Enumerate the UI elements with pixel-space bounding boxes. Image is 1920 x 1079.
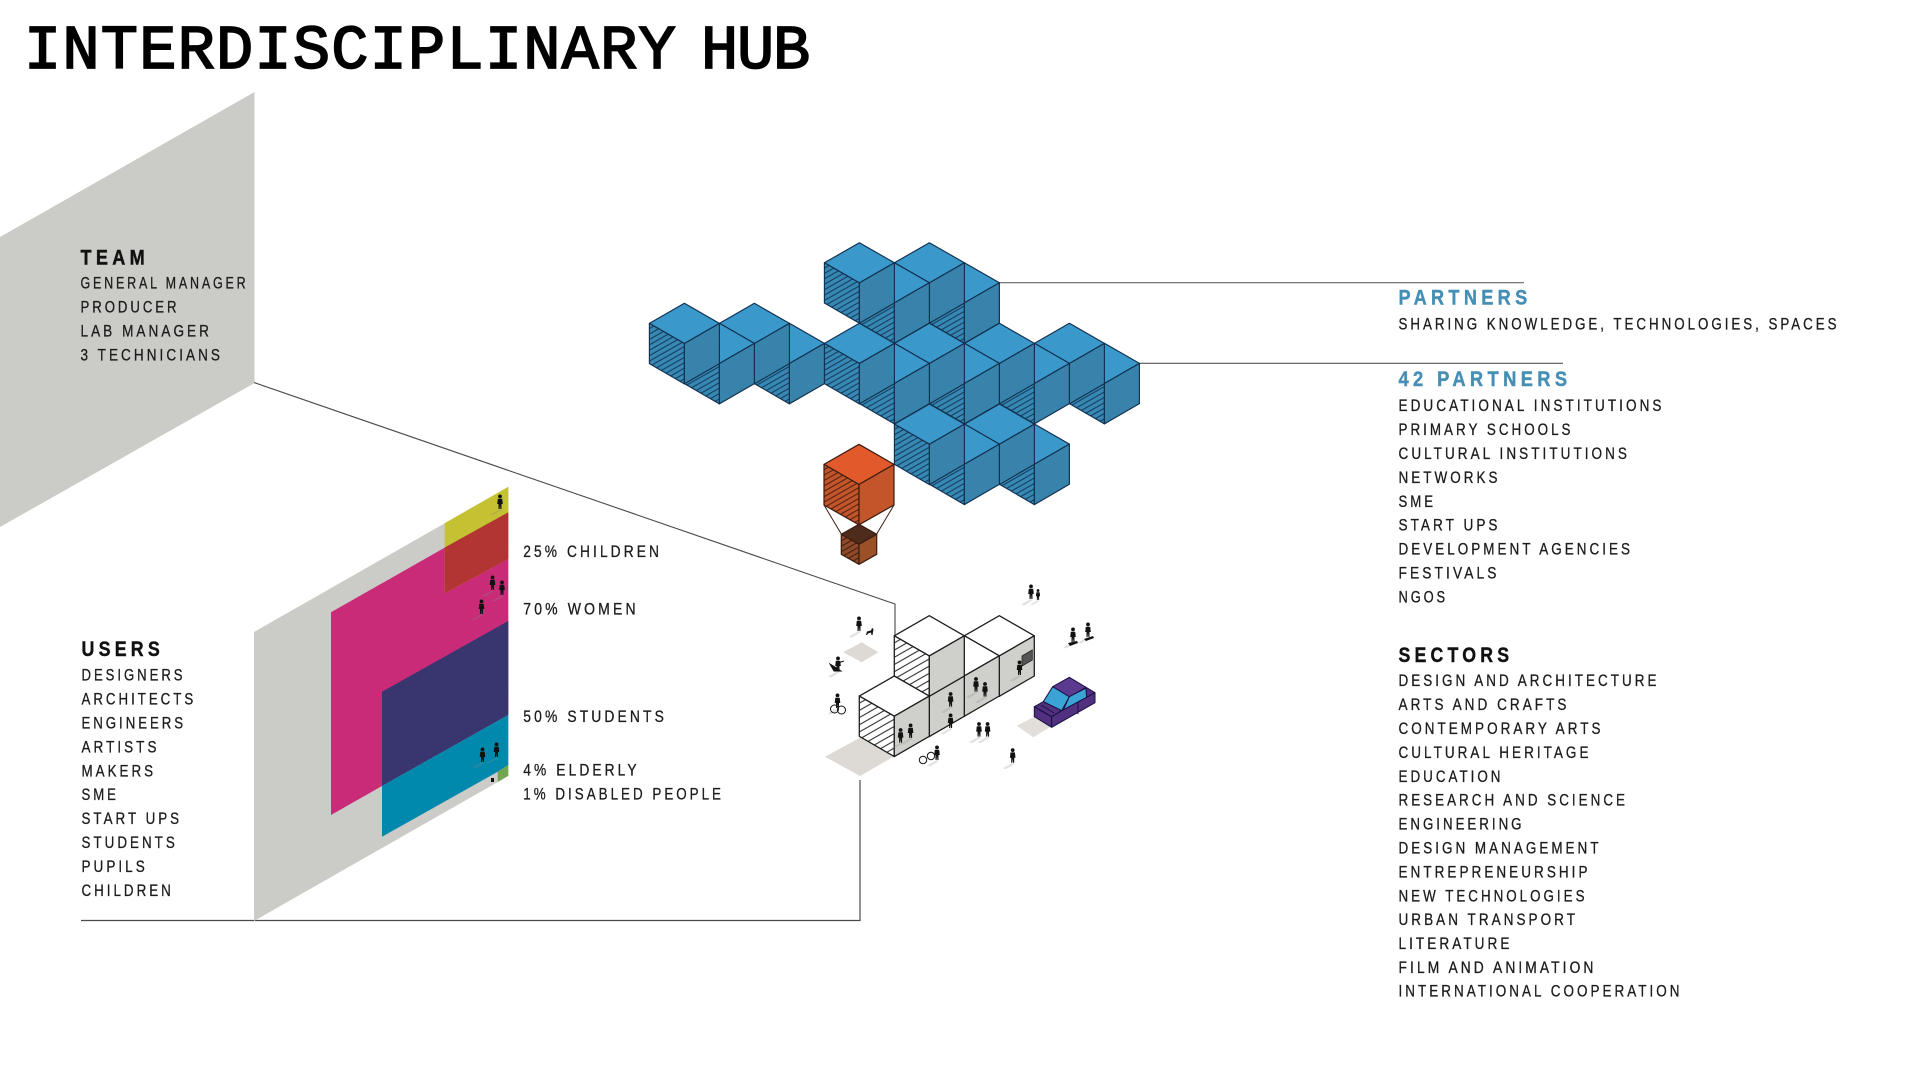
sectors list: LITERATURE bbox=[1398, 935, 1512, 953]
ground patch: car bbox=[1017, 717, 1051, 737]
chart labels: 1% DISABLED PEOPLE bbox=[523, 786, 724, 804]
figures around the building bbox=[828, 584, 1094, 769]
sectors list: DESIGN MANAGEMENT bbox=[1398, 840, 1602, 858]
users text block bbox=[82, 638, 196, 900]
team text block: LAB MANAGER bbox=[80, 322, 212, 340]
icon: car bbox=[1034, 677, 1095, 727]
ground patch: building bbox=[825, 738, 893, 776]
partners list: EDUCATIONAL INSTITUTIONS bbox=[1398, 397, 1664, 415]
partners heading and tagline bbox=[1398, 286, 1840, 334]
sectors list bbox=[1398, 644, 1682, 1001]
partners list: START UPS bbox=[1398, 517, 1500, 535]
chart labels: 25% CHILDREN bbox=[523, 543, 662, 561]
title: HUB bbox=[701, 16, 809, 87]
users text block: DESIGNERS bbox=[82, 666, 186, 684]
partners list: NGOS bbox=[1398, 588, 1448, 606]
sectors list: SECTORS bbox=[1398, 644, 1513, 667]
partners list: DEVELOPMENT AGENCIES bbox=[1398, 541, 1633, 559]
users text block: SME bbox=[82, 786, 119, 804]
users text block: PUPILS bbox=[82, 858, 148, 876]
users text block: ARCHITECTS bbox=[82, 690, 196, 708]
partners list: SME bbox=[1398, 493, 1436, 511]
sectors list: ENTREPRENEURSHIP bbox=[1398, 863, 1590, 881]
sectors list: EDUCATION bbox=[1398, 768, 1504, 786]
connector: partners lower bbox=[1139, 362, 1563, 364]
users text block: STUDENTS bbox=[82, 834, 178, 852]
users backdrop bbox=[254, 487, 508, 921]
partners cubes cloud bbox=[649, 243, 1139, 505]
sectors list: FILM AND ANIMATION bbox=[1398, 959, 1596, 977]
partners list bbox=[1398, 368, 1664, 606]
area: students 50% bbox=[382, 621, 508, 786]
area: women 70% bbox=[331, 512, 508, 815]
ground patch: plaza bbox=[843, 642, 878, 662]
partners list: FESTIVALS bbox=[1398, 564, 1500, 582]
chart labels: 70% WOMEN bbox=[523, 600, 639, 618]
area: children 25% bbox=[445, 487, 508, 593]
users text block: ARTISTS bbox=[82, 738, 160, 756]
partners list: 42 PARTNERS bbox=[1398, 368, 1572, 391]
users text block: START UPS bbox=[82, 810, 182, 828]
team text block: 3 TECHNICIANS bbox=[80, 346, 223, 364]
panel: team backdrop bbox=[0, 92, 254, 527]
partners list: NETWORKS bbox=[1398, 469, 1500, 487]
connector: users to building bbox=[81, 780, 860, 920]
sectors list: DESIGN AND ARCHITECTURE bbox=[1398, 672, 1660, 690]
sectors list: ARTS AND CRAFTS bbox=[1398, 696, 1570, 714]
chart labels: 4% ELDERLY bbox=[523, 762, 640, 780]
users text block: ENGINEERS bbox=[82, 714, 186, 732]
building: white cubes bbox=[859, 616, 1034, 757]
sectors list: CONTEMPORARY ARTS bbox=[1398, 720, 1604, 738]
connector: partners top bbox=[999, 282, 1524, 284]
area: elderly 4% bbox=[382, 715, 508, 837]
icon: orange balloon cube bbox=[824, 444, 894, 564]
team text block: TEAM bbox=[80, 246, 149, 270]
team text block bbox=[80, 246, 248, 364]
team text block: PRODUCER bbox=[80, 298, 180, 316]
sectors list: URBAN TRANSPORT bbox=[1398, 911, 1578, 929]
partners heading and tagline: PARTNERS bbox=[1398, 286, 1532, 310]
sectors list: ENGINEERING bbox=[1398, 816, 1524, 834]
sectors list: RESEARCH AND SCIENCE bbox=[1398, 792, 1628, 810]
users text block: USERS bbox=[82, 638, 164, 661]
users text block: CHILDREN bbox=[82, 882, 174, 900]
chart labels bbox=[523, 543, 724, 804]
users text block: MAKERS bbox=[82, 762, 156, 780]
users chart: isometric proportional areas bbox=[254, 487, 508, 921]
area: disabled people 1% bbox=[498, 765, 508, 782]
chart labels: 50% STUDENTS bbox=[523, 708, 667, 726]
sectors list: NEW TECHNOLOGIES bbox=[1398, 887, 1588, 905]
title: INTERDISCIPLINARY bbox=[24, 16, 677, 87]
sectors list: CULTURAL HERITAGE bbox=[1398, 744, 1592, 762]
icon: wall screen bbox=[1022, 650, 1032, 666]
area: children and women overlap bbox=[445, 512, 508, 593]
partners list: PRIMARY SCHOOLS bbox=[1398, 421, 1574, 439]
connector: team to building bbox=[254, 382, 895, 640]
partners list: CULTURAL INSTITUTIONS bbox=[1398, 445, 1630, 463]
team text block: GENERAL MANAGER bbox=[80, 274, 248, 292]
chart figures bbox=[472, 494, 505, 782]
sectors list: INTERNATIONAL COOPERATION bbox=[1398, 983, 1682, 1001]
